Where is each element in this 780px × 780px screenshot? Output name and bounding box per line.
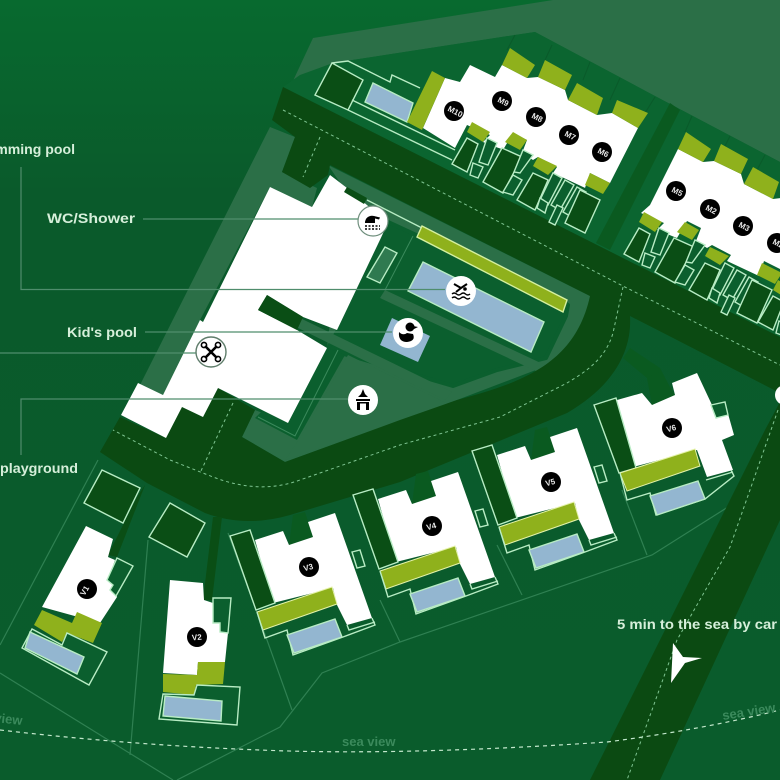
terrace row M10 to M6	[407, 48, 648, 233]
house labels M: M6	[596, 146, 611, 160]
house labels M: M9	[496, 95, 511, 109]
icon: wrench	[196, 337, 226, 367]
villa V2: V2	[192, 633, 203, 642]
label: sea view right: sea view	[721, 700, 777, 723]
house labels M: M3	[737, 220, 752, 234]
label: Kid's pool: Kid's pool	[67, 324, 137, 340]
terrace row M5 to M2	[624, 132, 780, 391]
playground lawn	[285, 355, 450, 460]
direction arrow	[671, 643, 702, 683]
icon: swimmer	[446, 276, 476, 306]
terrace square	[367, 247, 397, 283]
swimming pool	[408, 262, 544, 352]
garden light surround	[242, 165, 600, 462]
yards row 2 continued	[758, 280, 780, 391]
light green strip: west edge	[140, 127, 317, 395]
house labels M: M7	[563, 129, 578, 143]
plot base: north houses	[283, 32, 780, 345]
M9 to M6 top lawns	[502, 48, 648, 128]
M9 to M6 yards	[452, 122, 610, 233]
villa V4	[353, 471, 498, 614]
house labels M: M10	[446, 104, 465, 120]
label: 5 min to the sea by car: 5 min to the sea by car	[617, 616, 778, 632]
hatched area: north field	[292, 0, 780, 162]
road centre lines	[113, 110, 780, 780]
plot lines north of terraces	[507, 35, 765, 170]
clubhouse building	[121, 175, 388, 438]
villa V6	[594, 372, 734, 515]
label: sea view centre: sea view	[342, 734, 396, 749]
villa V3: V3	[302, 562, 315, 573]
villa V6: V6	[665, 423, 678, 434]
leader lines	[0, 167, 445, 455]
label: WC/Shower: WC/Shower	[47, 210, 136, 226]
yards row 2	[624, 212, 780, 323]
label: playground: playground	[0, 460, 78, 476]
villa V1	[22, 470, 145, 685]
villa V5: V5	[544, 477, 557, 488]
line north of clubhouse	[367, 200, 422, 228]
villa V4: V4	[425, 521, 438, 532]
M10 to M6 white block	[423, 65, 638, 188]
house labels M: M5	[670, 185, 685, 199]
plot boundary lines	[0, 410, 778, 780]
villa V5	[472, 427, 617, 570]
villa V2	[149, 503, 240, 725]
garden lime lawn	[417, 226, 567, 312]
house labels M: M8	[530, 111, 545, 125]
villa V3	[230, 512, 375, 655]
sea view arc	[0, 710, 780, 752]
icon: playground	[348, 385, 378, 415]
M10 lime	[407, 71, 445, 130]
garden plots	[255, 222, 568, 440]
M5 to M2 white block	[641, 149, 780, 280]
icon: duck	[393, 318, 423, 348]
clubhouse dark notch	[258, 295, 303, 330]
house labels M: M2	[704, 203, 719, 217]
villa V1: V1	[78, 584, 91, 597]
white marker at east edge	[775, 385, 780, 405]
house labels M	[444, 91, 780, 253]
top lawns row 2	[678, 132, 780, 212]
roads	[100, 87, 780, 780]
west house with pool	[315, 61, 455, 160]
kid's pool	[380, 318, 430, 362]
icon: shower	[358, 206, 388, 236]
clubhouse north bar	[344, 187, 367, 204]
